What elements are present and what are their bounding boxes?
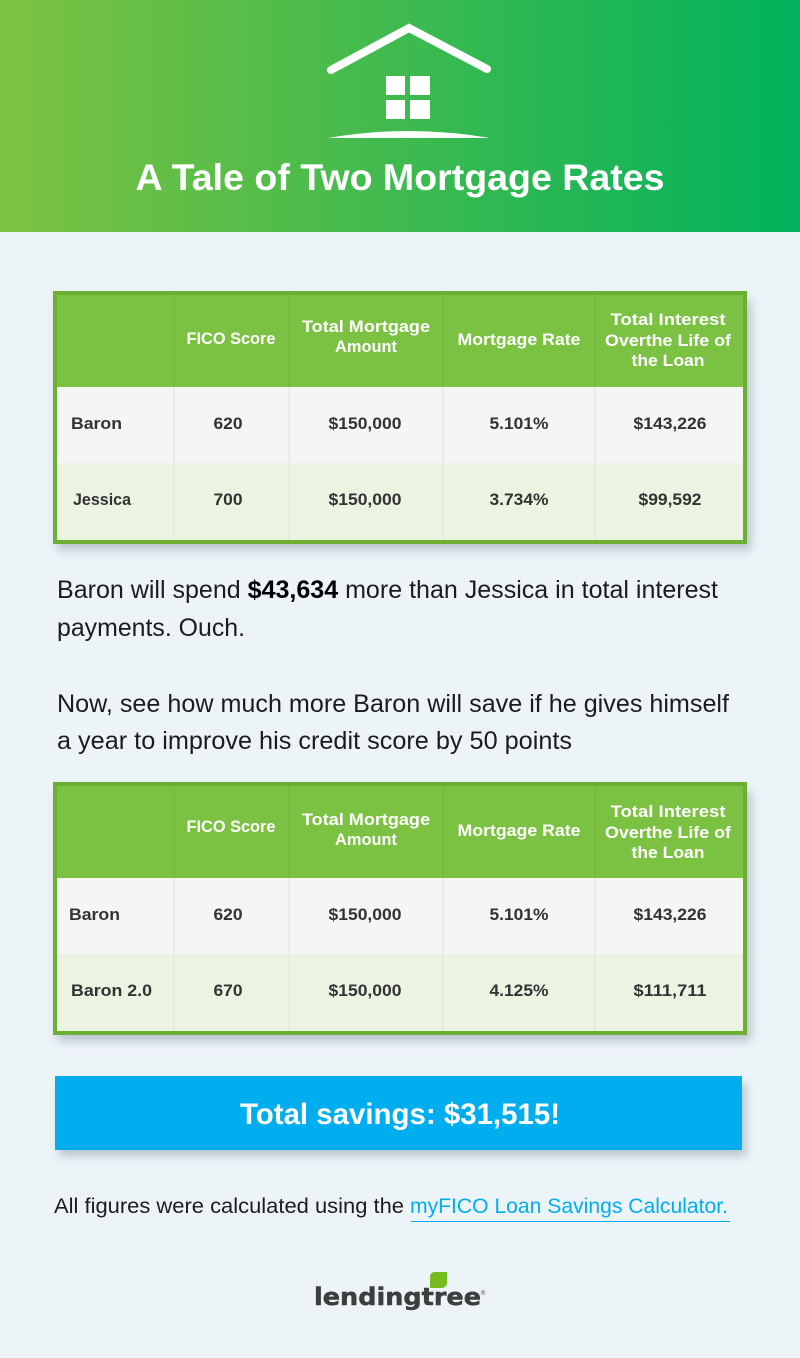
table header: Mortgage Rate	[458, 821, 580, 840]
icon: house	[328, 28, 490, 138]
row: Baron 2.0: $150,000	[328, 981, 402, 1000]
table header: the Loan	[632, 351, 704, 370]
header banner	[0, 0, 800, 232]
callout: total savings	[55, 1076, 746, 1156]
table: Baron vs Baron 2.0	[53, 782, 751, 1041]
table header	[186, 310, 731, 370]
title: A Tale of Two Mortgage Rates	[136, 157, 664, 198]
row: Jessica: Jessica	[73, 490, 132, 509]
row: Jessica: 700	[214, 490, 242, 509]
logo: lendingtree: ®	[481, 1290, 486, 1297]
table header: Overthe Life of	[605, 823, 731, 842]
text: improvement intro: Now, see how much more Baron will save if he gives himself	[57, 690, 729, 718]
table header: FICO Score	[186, 329, 276, 348]
row: Baron 2.0	[71, 981, 706, 1000]
row: Jessica: 3.734%	[490, 490, 548, 509]
row: Baron: 5.101%	[490, 905, 548, 924]
row: Baron	[69, 905, 706, 924]
table header: Total Interest	[610, 310, 726, 329]
row: Baron	[71, 414, 706, 433]
row: Baron 2.0: $111,711	[634, 981, 706, 1000]
table header: Total Mortgage	[302, 810, 430, 829]
table header: Amount	[335, 830, 397, 849]
text: interest difference: Baron will spend $43,634 more than Jessica in total interest	[57, 576, 718, 604]
row: Baron: 620	[214, 905, 242, 924]
icon: leaf	[430, 1272, 447, 1288]
table header: Overthe Life of	[605, 331, 731, 350]
row: Baron 2.0: 4.125%	[490, 981, 548, 1000]
row: Baron: $150,000	[328, 905, 402, 924]
row: Baron: Baron	[71, 414, 122, 433]
row: Baron: 5.101%	[490, 414, 548, 433]
row: Jessica	[73, 490, 702, 509]
table header: Total Interest	[610, 802, 726, 821]
row: Jessica: $150,000	[328, 490, 402, 509]
source note	[54, 1195, 730, 1222]
logo: lendingtree	[314, 1272, 486, 1311]
table header: Mortgage Rate	[458, 330, 580, 349]
row: Baron: 620	[214, 414, 242, 433]
table: Baron vs Jessica	[53, 291, 751, 550]
text: improvement intro: a year to improve his credit score by 50 points	[57, 727, 572, 755]
source note: All figures were calculated using the	[54, 1195, 404, 1218]
row: Jessica: $99,592	[638, 490, 702, 509]
table header: FICO Score	[186, 817, 276, 836]
text: improvement intro	[57, 690, 729, 755]
row: Baron 2.0: 670	[214, 981, 242, 1000]
row: Baron: Baron	[69, 905, 120, 924]
logo: lendingtree: lendingtree	[314, 1283, 481, 1311]
row: Baron: $143,226	[634, 414, 706, 433]
table header	[186, 802, 731, 862]
row: Baron 2.0: Baron 2.0	[71, 981, 152, 1000]
table header: Amount	[335, 337, 397, 356]
table header: Total Mortgage	[302, 317, 430, 336]
table header: the Loan	[632, 843, 704, 862]
text: interest difference	[57, 576, 718, 642]
source note: myFICO Loan Savings Calculator.	[410, 1195, 728, 1218]
row: Baron: $143,226	[634, 905, 706, 924]
text: interest difference: payments. Ouch.	[57, 614, 245, 642]
callout: total savings: Total savings: $31,515!	[240, 1098, 560, 1131]
row: Baron: $150,000	[328, 414, 402, 433]
